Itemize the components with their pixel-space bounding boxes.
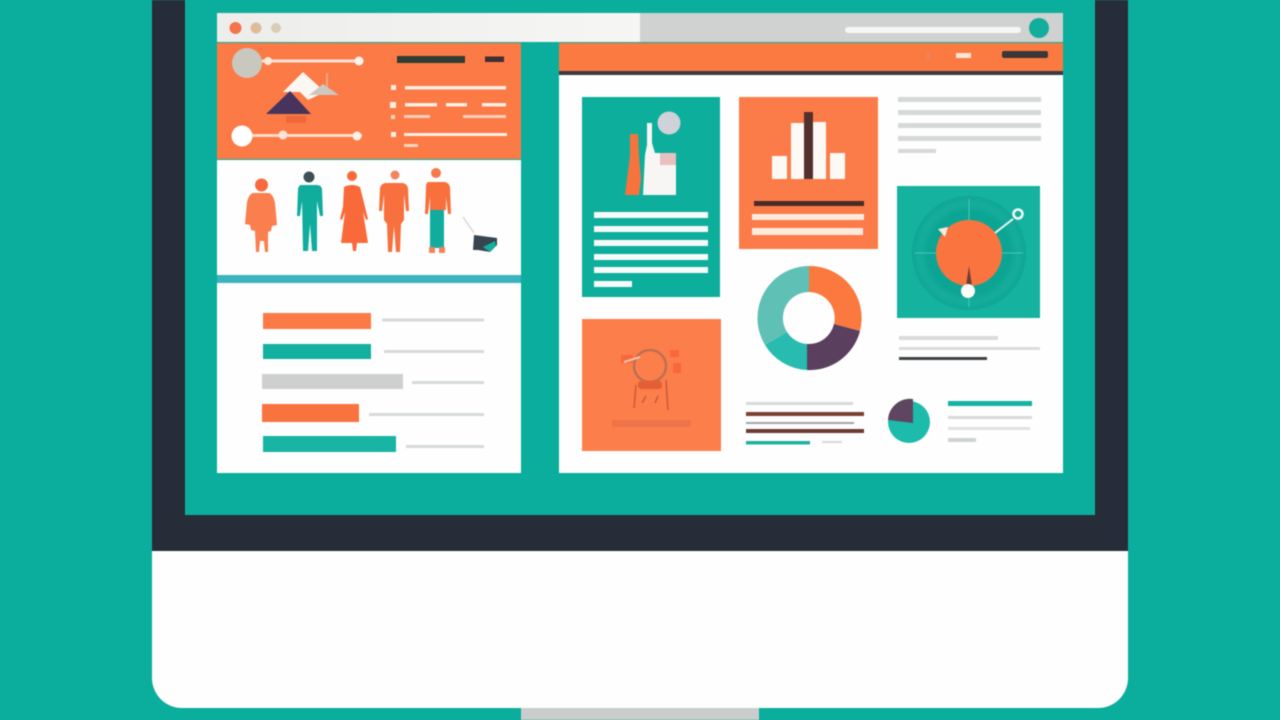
profile button xyxy=(1029,18,1049,38)
figure: teal person xyxy=(297,172,323,251)
bar row 3 xyxy=(262,374,484,389)
divider: teal strip xyxy=(217,275,521,283)
card: orange column chart xyxy=(739,97,878,249)
bar row 5 xyxy=(263,436,484,452)
text block: pie legend xyxy=(948,401,1032,442)
panel: right content xyxy=(559,75,1063,473)
column chart xyxy=(772,112,845,179)
target chart xyxy=(912,196,1026,310)
panel: people xyxy=(217,160,521,275)
figure: person in coat xyxy=(245,178,277,252)
chart: donut xyxy=(757,266,862,370)
heading bars xyxy=(397,56,504,63)
bar row 2 xyxy=(263,344,484,359)
text block: top right xyxy=(898,97,1041,153)
icon: small dog xyxy=(463,217,497,252)
monitor bezel xyxy=(152,0,1128,552)
panel: orange header card xyxy=(217,43,521,159)
figure: person in dress xyxy=(340,171,368,251)
text block: below target xyxy=(899,336,1040,360)
icon: mountains xyxy=(266,72,339,123)
card: orange portrait xyxy=(582,319,721,451)
icon: round figure xyxy=(621,350,681,410)
faint caption xyxy=(612,420,691,427)
browser title bar xyxy=(217,13,1063,42)
address field xyxy=(845,27,1021,33)
figure: person with teal trousers xyxy=(425,168,451,253)
monitor stand xyxy=(521,706,759,720)
figure: orange person xyxy=(379,170,409,252)
bar row 1 xyxy=(263,313,484,329)
header text bars xyxy=(927,51,1048,59)
window buttons xyxy=(230,22,281,34)
bar row 4 xyxy=(262,404,484,422)
chart caption lines xyxy=(752,201,864,235)
monitor chin xyxy=(152,551,1128,708)
bullet list xyxy=(390,85,507,147)
panel: right header xyxy=(559,43,1063,75)
slider: white xyxy=(232,126,362,146)
chart: small pie xyxy=(888,399,930,443)
panel: horizontal bars xyxy=(217,283,521,473)
icon: bottles xyxy=(625,112,680,195)
card text lines xyxy=(594,212,708,287)
slider: grey xyxy=(232,48,364,78)
monitor screen xyxy=(185,0,1095,515)
card: teal target xyxy=(897,186,1040,318)
list: legend lines xyxy=(746,402,864,444)
card: teal bottles xyxy=(582,97,720,297)
